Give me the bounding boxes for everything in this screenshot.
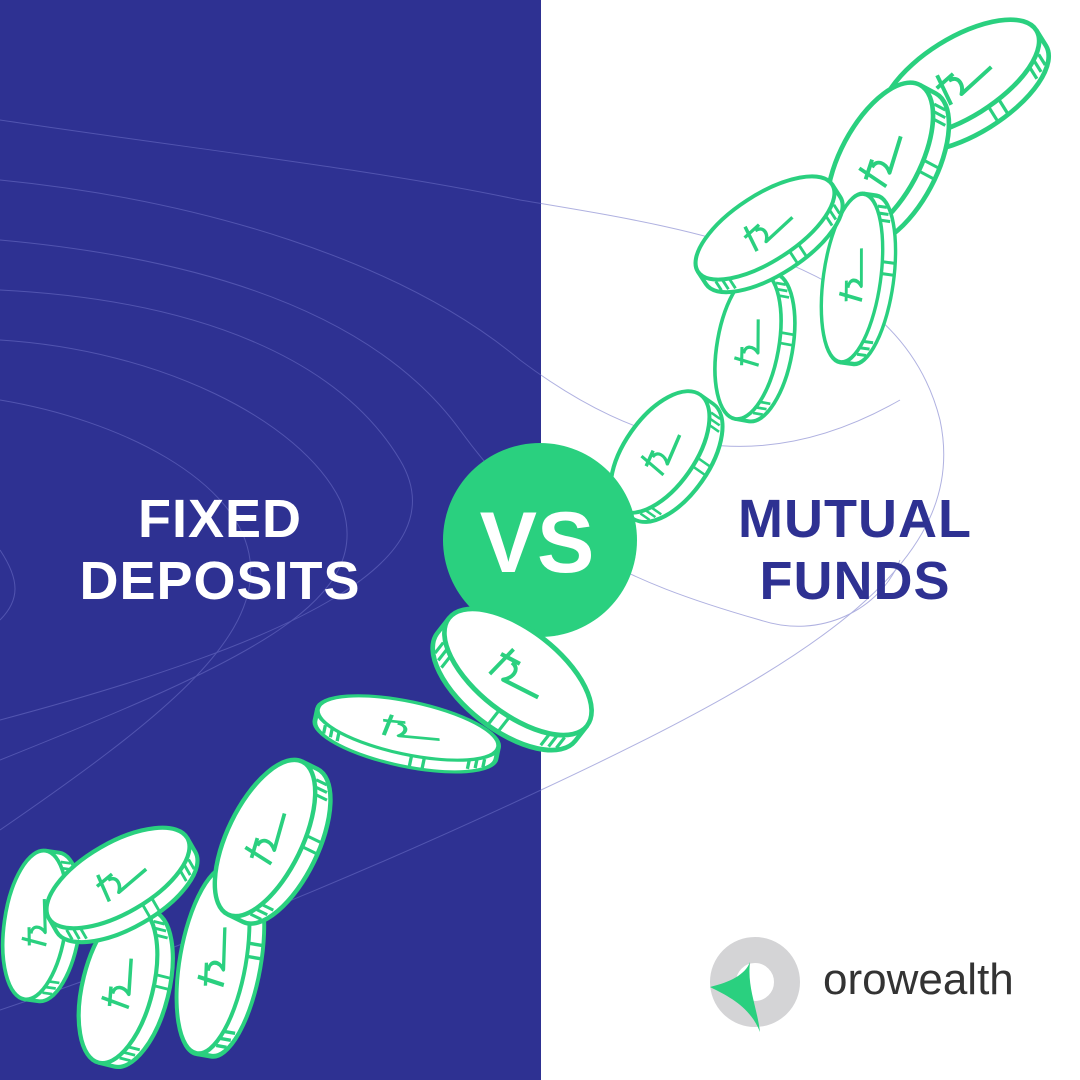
heading: fixed deposits: DEPOSITS [79, 551, 361, 611]
coin group bottom left [0, 683, 504, 1075]
coin group right rising [591, 0, 1067, 539]
VS circle: VS [480, 495, 594, 591]
logo: orowealth [710, 937, 1014, 1032]
heading: fixed deposits: FIXED [138, 489, 302, 549]
VS circle [443, 443, 637, 637]
heading: mutual funds: MUTUAL [738, 489, 972, 549]
icon: logo mark [710, 937, 800, 1032]
heading: mutual funds: FUNDS [760, 551, 950, 611]
logo text: orowealth [823, 955, 1014, 1004]
panel: left blue background [0, 0, 541, 1080]
heading: fixed deposits [79, 489, 361, 611]
heading: mutual funds [738, 489, 972, 611]
coin tilted below VS [412, 585, 613, 774]
